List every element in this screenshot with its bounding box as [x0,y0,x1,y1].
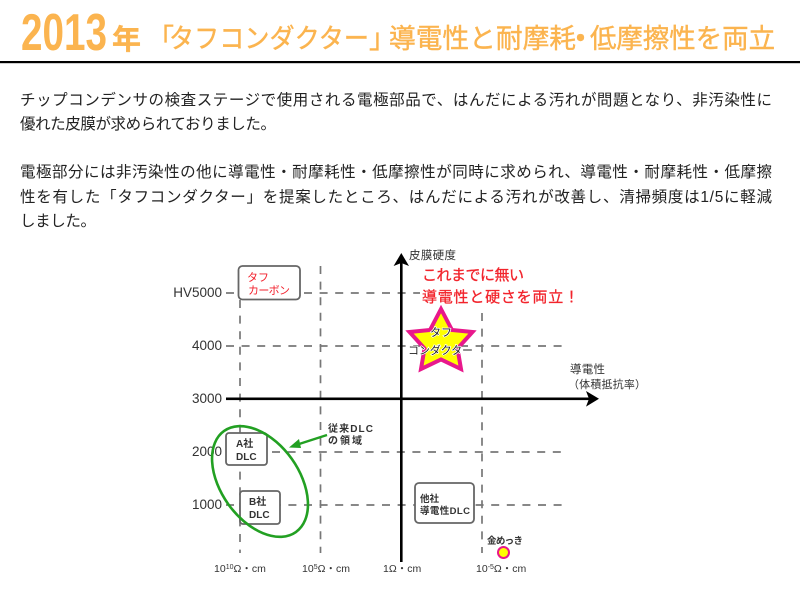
y axis labels: 3000 [192,391,222,406]
box: tough carbon [238,266,300,300]
y axis labels: 2000 [192,444,222,459]
box: company A DLC [226,433,267,465]
x axis labels: 5 [314,564,318,571]
x axis title [568,362,646,391]
text block: proposal [20,163,772,230]
title [21,4,775,62]
x axis labels [214,563,527,575]
callout: unprecedented: 導電性と硬さを両立！ [422,289,579,306]
label: conventional DLC region: の領域 [328,434,362,447]
marker: gold plating [487,535,523,558]
callout: unprecedented: これまでに無い [422,267,524,284]
box: other conductive DLC [415,483,474,523]
x axis labels: Ω・cm [233,563,266,575]
y axis labels: 4000 [192,338,222,353]
title: 低摩擦性を両立 [590,24,775,54]
y axis title: 皮膜硬度 [409,249,456,262]
text block: proposal: しました。 [20,212,96,230]
x axis labels: 10 [214,563,226,575]
box: company A DLC: A社 [236,437,253,450]
box: company A DLC: DLC [236,452,257,463]
text block: intro: チップコンデンサの検査ステージで使用される電極部品で、はんだによる汚れが問題となり、非汚染性に [20,90,772,109]
y axis labels [173,285,222,512]
title: タフコンダクター [169,24,369,54]
x axis labels: 10 [226,564,234,571]
x axis labels: 10 [476,563,488,575]
title: ・ [567,24,594,54]
x axis labels: Ω・cm [318,563,350,575]
box: company B DLC: DLC [249,510,270,521]
title: 2013 [21,4,107,62]
ellipse: conventional DLC region [192,408,328,555]
box: company B DLC: B社 [249,495,266,508]
text block: intro: 優れた皮膜が求められておりました。 [20,115,276,133]
marker: gold plating: 金めっき [487,535,523,547]
x axis title: 導電性 [570,362,605,376]
y axis labels: 1000 [192,497,222,512]
chart: hardness vs conductivity [173,249,646,575]
x axis title: （体積抵抗率） [568,377,646,391]
box: company B DLC [240,491,280,524]
x axis labels: Ω・cm [494,563,527,575]
x axis labels: 1Ω・cm [383,563,421,575]
box: other conductive DLC: 導電性DLC [420,505,470,517]
box: tough carbon: タフ [247,271,269,284]
axes [226,253,599,562]
box: tough carbon: カーボン [248,284,290,297]
grid lines [226,266,563,553]
label: conventional DLC region [328,422,373,447]
text block: intro [20,90,772,133]
star: tough conductor [408,309,473,369]
x axis labels: 10 [302,563,314,575]
label: conventional DLC region: 従来DLC [328,422,373,435]
title: 導電性と耐摩耗 [389,24,576,54]
title: 年 [112,24,141,55]
callout: unprecedented [422,267,579,306]
star: tough conductor: コンダクター [408,343,473,357]
x axis labels: -5 [488,564,494,571]
title: 「 [147,24,174,54]
text block: proposal: 電極部分には非汚染性の他に導電性・耐摩耗性・低摩擦性が同時に求められ、導電性・耐摩耗性・低摩擦 [20,163,772,181]
title: 」 [369,24,396,54]
y axis labels: HV5000 [173,285,222,300]
arrow: to conventional DLC region [289,435,327,448]
text block: proposal: 性を有した「タフコンダクター」を提案したところ、はんだによる汚れが改善し、清掃頻度は1/5に軽減 [20,188,772,206]
star: tough conductor: タフ [430,326,452,339]
box: other conductive DLC: 他社 [420,493,440,505]
header rule [0,61,800,63]
